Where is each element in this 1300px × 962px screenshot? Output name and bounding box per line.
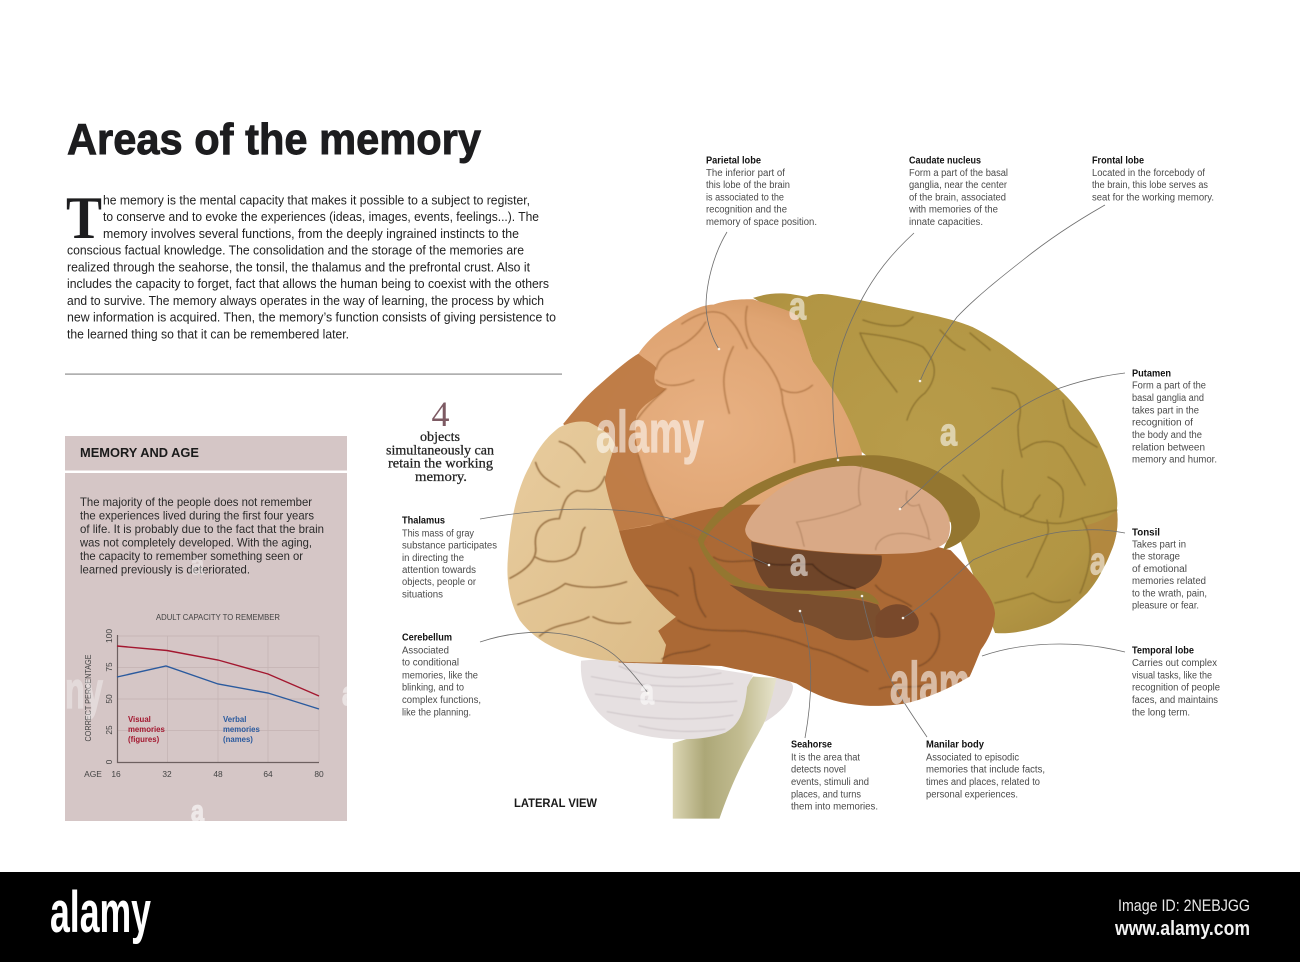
line chart: adult capacity to remember: ADULT CAPACITY TO REMEMBER: [156, 612, 280, 622]
label: putamen: Form a part of the: [1132, 380, 1207, 392]
thalamus fold: [753, 559, 856, 589]
illustration: brain lateral view: [507, 293, 1118, 819]
title: Areas of the memory: [67, 115, 481, 164]
watermarks: alam: [890, 651, 970, 716]
label: parietal lobe: The inferior part of: [706, 168, 785, 179]
watermarks: a: [789, 286, 807, 328]
line chart: adult capacity to remember: 80: [314, 769, 324, 779]
panel header: [65, 436, 347, 470]
label: cerebellum: Associated: [402, 646, 449, 656]
label: caudate nucleus: Caudate nucleus: [909, 156, 981, 166]
label: frontal lobe: seat for the working memory.: [1092, 192, 1214, 204]
label: parietal lobe: Parietal lobe: [706, 156, 762, 166]
label: tonsil: to the wrath, pain,: [1132, 588, 1207, 600]
label: tonsil: Tonsil: [1132, 528, 1160, 538]
line chart: adult capacity to remember: 32: [162, 769, 172, 779]
intro paragraph: and to survive. The memory always operates in the way of learning, the process by which: [67, 293, 544, 308]
label: lateral view: LATERAL VIEW: [514, 798, 597, 810]
frontal pole shading: [1085, 510, 1118, 584]
label: putamen: the body and the: [1132, 430, 1203, 441]
line chart: adult capacity to remember: 0: [104, 759, 114, 764]
brain surface folds: [510, 306, 1117, 689]
watermarks: ny: [65, 662, 103, 720]
temporal folds: [646, 557, 939, 689]
parietal darker rim: [563, 354, 666, 531]
line chart: adult capacity to remember: 48: [213, 769, 223, 779]
label: putamen: takes part in the: [1132, 406, 1200, 416]
watermarks: a: [940, 412, 958, 454]
label: manilar body: Associated to episodic: [926, 752, 1019, 764]
panel text: of life. It is probably due to the fact that the brain: [80, 523, 324, 536]
temporal lobe: [599, 484, 995, 706]
callout: 4 objects: objects: [420, 429, 460, 444]
line chart: adult capacity to remember: 50: [104, 694, 114, 704]
label: thalamus: attention towards: [402, 565, 476, 576]
intro paragraph: conscious factual knowledge. The consolidation and the storage of the memories are: [67, 242, 524, 258]
panel text: was not completely developed. With the aging,: [79, 536, 312, 550]
watermarks: alamy: [596, 400, 704, 465]
legend: verbal memories: memories: [223, 725, 261, 734]
label: tonsil: pleasure or fear.: [1132, 600, 1199, 612]
label: tonsil: of emotional: [1132, 564, 1187, 575]
label: seahorse: Seahorse: [791, 740, 832, 750]
footer bar: [0, 872, 1300, 962]
label: thalamus: situations: [402, 590, 443, 600]
label: caudate nucleus: Form a part of the basal: [909, 168, 1008, 179]
label: thalamus: This mass of gray: [402, 528, 474, 540]
panel text: [79, 496, 324, 576]
label: cerebellum: [402, 632, 481, 718]
label: tonsil: memories related: [1132, 576, 1206, 587]
label: cerebellum: Cerebellum: [402, 632, 452, 644]
legend: verbal memories: (names): [223, 735, 253, 744]
putamen: [745, 466, 950, 554]
label: seahorse: detects novel: [791, 764, 846, 776]
callout: 4 objects: 4: [432, 394, 450, 434]
label: manilar body: times and places, related to: [926, 777, 1041, 788]
line chart: adult capacity to remember: 25: [104, 725, 114, 735]
frontal lobe: [753, 293, 1118, 633]
footer url: www.alamy.com: [1114, 918, 1250, 940]
legend: verbal memories: Verbal: [223, 715, 246, 724]
label: seahorse: [791, 740, 878, 812]
label: caudate nucleus: with memories of the: [908, 204, 999, 216]
line chart: adult capacity to remember: CORRECT PERCENTAGE: [83, 654, 93, 742]
intro paragraph: [66, 185, 556, 342]
label: caudate nucleus: [908, 156, 1008, 228]
intro paragraph: new information is acquired. Then, the memory’s function consists of giving persistence to: [67, 310, 556, 324]
label: manilar body: Manilar body: [926, 740, 985, 750]
line chart: adult capacity to remember: 75: [104, 662, 114, 672]
intro paragraph: he memory is the mental capacity that makes it possible to a subject to register,: [103, 192, 530, 208]
watermarks: a: [1090, 541, 1107, 583]
label: caudate nucleus: innate capacities.: [909, 217, 983, 228]
panel text: learned previously is deteriorated.: [80, 564, 250, 576]
label: temporal lobe: faces, and maintains: [1132, 695, 1218, 706]
label: cerebellum: to conditional: [402, 658, 459, 668]
label: manilar body: [926, 740, 1045, 800]
panel body: [65, 473, 347, 821]
intro paragraph: the learned thing so that it can be remembered later.: [67, 326, 349, 342]
label: cerebellum: like the planning.: [402, 708, 471, 718]
label: tonsil: [1132, 528, 1207, 612]
label: parietal lobe: [706, 156, 817, 228]
line chart: adult capacity to remember: 100: [104, 629, 114, 643]
leader dots: [647, 348, 921, 694]
blue line: verbal memories: [117, 666, 319, 709]
label: putamen: memory and humor.: [1132, 454, 1217, 466]
line chart: adult capacity to remember: AGE: [84, 769, 102, 779]
label: thalamus: objects, people or: [402, 577, 477, 588]
label: cerebellum: memories, like the: [402, 670, 479, 682]
label: tonsil: Takes part in: [1132, 540, 1186, 550]
label: manilar body: personal experiences.: [926, 790, 1018, 800]
label: frontal lobe: [1092, 156, 1214, 204]
label: temporal lobe: the long term.: [1132, 708, 1190, 718]
label: thalamus: [402, 516, 497, 600]
label: parietal lobe: this lobe of the brain: [706, 180, 790, 191]
watermarks: a: [342, 675, 357, 713]
label: frontal lobe: Located in the forcebody of: [1092, 168, 1205, 179]
legend: visual memories: [128, 715, 166, 744]
legend: visual memories: memories: [128, 725, 166, 734]
label: temporal lobe: Carries out complex: [1132, 658, 1217, 669]
label: putamen: Putamen: [1132, 368, 1171, 380]
label: cerebellum: complex functions,: [402, 695, 481, 706]
label: putamen: relation between: [1132, 442, 1205, 454]
callout: 4 objects: simultaneously can: [386, 442, 494, 458]
panel text: the capacity to remember something seen or: [80, 550, 303, 563]
parietal folds: [636, 306, 812, 543]
label: cerebellum: blinking, and to: [402, 682, 465, 694]
brain stem: [673, 677, 779, 819]
callout: 4 objects: [386, 394, 494, 484]
watermarks: a: [191, 795, 204, 828]
label: caudate nucleus: ganglia, near the center: [909, 180, 1008, 191]
line chart: adult capacity to remember: [83, 612, 324, 779]
tonsil: [876, 604, 919, 638]
watermarks: a: [640, 671, 655, 712]
seahorse: [729, 585, 882, 640]
red line: visual memories: [117, 646, 319, 696]
putamen folds: [797, 466, 931, 550]
label: seahorse: them into memories.: [791, 802, 878, 812]
leader lines: [480, 205, 1125, 738]
label: putamen: [1132, 368, 1217, 466]
label: seahorse: places, and turns: [791, 790, 861, 800]
panel text: The majority of the people does not remember: [80, 496, 312, 509]
watermarks: [65, 286, 1107, 828]
label: manilar body: memories that include facts,: [926, 764, 1045, 776]
label: temporal lobe: [1132, 646, 1221, 718]
intro paragraph: to conserve and to evoke the experiences (ideas, images, events, feelings...). The: [103, 209, 539, 224]
parietal lobe: [563, 299, 862, 531]
label: thalamus: in directing the: [402, 553, 465, 564]
frontal folds: [860, 317, 1117, 603]
label: seahorse: It is the area that: [791, 752, 860, 764]
panel text: the experiences lived during the first four years: [80, 510, 314, 522]
label: putamen: recognition of: [1132, 418, 1193, 428]
label: tonsil: the storage: [1132, 552, 1181, 562]
intro paragraph: memory involves several functions, from the deeply ingrained instincts to the: [103, 226, 519, 241]
cerebellum: [581, 657, 793, 739]
watermarks: a: [191, 548, 204, 581]
limbic band: [698, 455, 980, 605]
occipital lobe: [507, 421, 676, 662]
panel heading: MEMORY AND AGE: [80, 446, 199, 460]
footer logo: alamy: [50, 880, 151, 945]
callout: 4 objects: memory.: [415, 469, 467, 484]
divider rule: [65, 374, 562, 375]
watermarks: a: [790, 542, 808, 584]
legend: verbal memories: [223, 715, 261, 744]
intro paragraph: T: [66, 185, 102, 251]
label: thalamus: substance participates: [402, 540, 497, 552]
legend: visual memories: Visual: [128, 715, 151, 724]
line chart: adult capacity to remember: 64: [263, 769, 273, 779]
intro paragraph: includes the capacity to forget, fact that allows the human being to coexist with the others: [67, 276, 549, 291]
legend: visual memories: (figures): [128, 735, 160, 744]
occipital folds: [510, 441, 630, 636]
line chart: adult capacity to remember: 16: [111, 769, 121, 779]
intro paragraph: realized through the seahorse, the tonsil, the thalamus and the prefrontal crust. Also it: [67, 260, 530, 274]
label: frontal lobe: the brain, this lobe serves as: [1092, 180, 1208, 191]
label: parietal lobe: is associated to the: [706, 192, 785, 204]
label: caudate nucleus: of the brain, associated: [909, 192, 1006, 204]
panel: memory and age: [65, 436, 347, 821]
label: putamen: basal ganglia and: [1132, 393, 1204, 404]
footer image id: Image ID: 2NEBJGG: [1118, 896, 1250, 915]
label: temporal lobe: visual tasks, like the: [1132, 670, 1213, 682]
label: thalamus: Thalamus: [402, 516, 446, 526]
label: parietal lobe: memory of space position.: [706, 217, 817, 228]
callout: 4 objects: retain the working: [388, 456, 493, 470]
label: temporal lobe: Temporal lobe: [1132, 646, 1195, 656]
label: seahorse: events, stimuli and: [791, 777, 869, 788]
thalamus: [751, 541, 882, 591]
label: parietal lobe: recognition and the: [706, 204, 788, 216]
label: frontal lobe: Frontal lobe: [1092, 156, 1145, 166]
label: temporal lobe: recognition of people: [1132, 682, 1221, 694]
